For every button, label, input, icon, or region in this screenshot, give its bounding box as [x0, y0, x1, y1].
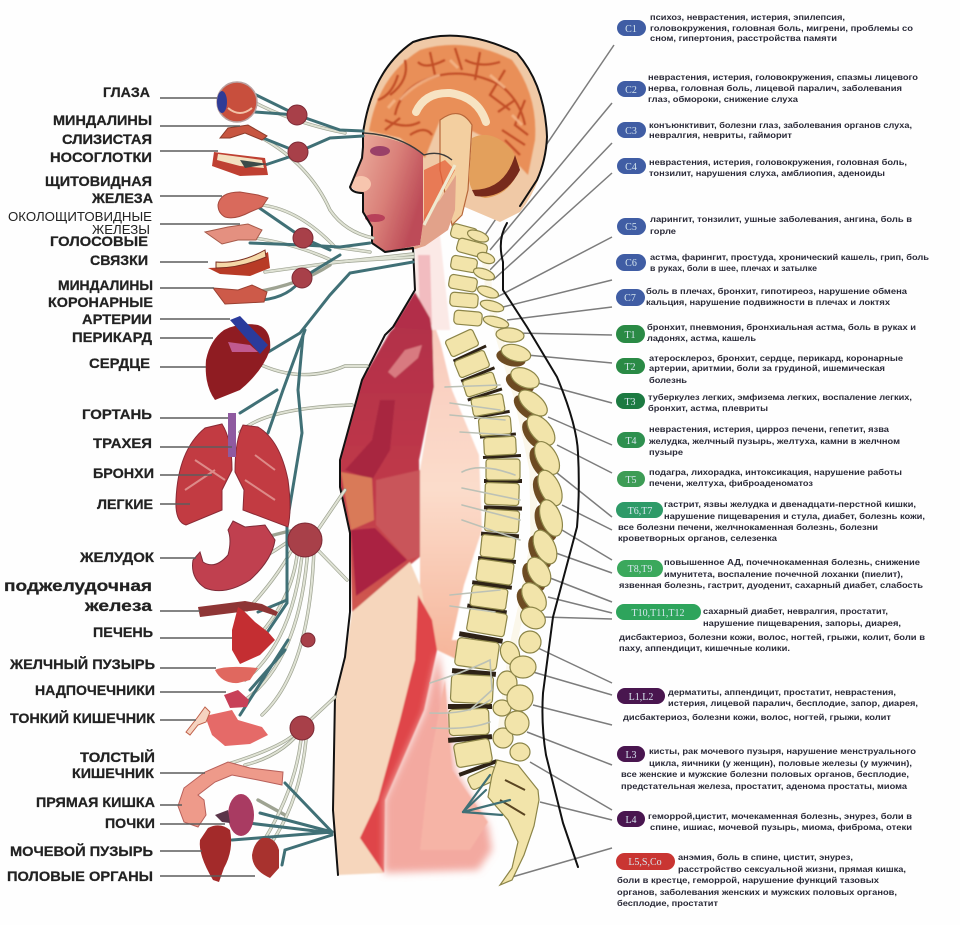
light gyri bands — [388, 60, 522, 125]
T3: T3 — [624, 397, 636, 408]
right column: conditions by vertebra — [616, 12, 929, 908]
skull — [363, 36, 547, 235]
organ names: СВЯЗКИ — [90, 252, 148, 268]
teal nerves — [232, 92, 413, 865]
organ names: МИНДАЛИНЫ — [58, 277, 153, 293]
light nerve cores — [225, 100, 413, 842]
organ names: ПЕЧЕНЬ — [93, 624, 153, 640]
T10 T11 T12 — [616, 604, 925, 653]
sacrum and coccyx — [488, 760, 539, 885]
T3: туберкулез легких, эмфизема легких, воспаление легких, — [648, 392, 912, 402]
T4: неврастения, истерия, цирроз печени, гепетит, язва — [649, 424, 889, 434]
T8 T9: T8,T9 — [628, 564, 652, 575]
leader lines: spine to conditions — [483, 45, 614, 877]
mottled lung light patches — [345, 400, 395, 480]
organ names: ГОРТАНЬ — [82, 406, 152, 422]
L1 L2 — [617, 687, 918, 722]
L3: все женские и мужские болезни половых органов, бесплодие, — [621, 769, 909, 779]
T6 T7: кроветворных органов, селезенка — [618, 533, 777, 543]
organ names — [4, 84, 155, 884]
T6 T7: нарушение пищеварения и стула, диабет, болезнь кожи, — [664, 511, 925, 521]
organ names: КОРОНАРНЫЕ — [48, 294, 153, 310]
organ names: ГЛАЗА — [103, 84, 150, 100]
T1: бронхит, пневмония, бронхиальная астма, боль в руках и — [647, 322, 916, 332]
vertebral discs — [448, 345, 522, 777]
body outline — [333, 36, 579, 875]
gyri — [378, 48, 528, 155]
C4: тонзилит, нарушения слуха, амблиопия, аденоиды — [649, 168, 885, 178]
T5 — [617, 467, 902, 488]
icon: tonsils — [220, 125, 267, 140]
icon: large intestine — [178, 762, 283, 827]
sacral teal nerves — [463, 775, 510, 815]
T5: подагра, лихорадка, интоксикация, нарушение работы — [649, 467, 902, 477]
organ names: поджелудочная — [4, 578, 152, 595]
C2: нерва, головная боль, лицевой паралич, заболевания — [648, 83, 902, 93]
C6: C6 — [625, 258, 637, 269]
C7: C7 — [624, 293, 636, 304]
organ names: НАДПОЧЕЧНИКИ — [35, 682, 155, 698]
C1: головокружения, головная боль, мигрени, проблемы со — [650, 23, 913, 33]
organ names: БРОНХИ — [93, 465, 154, 481]
spine — [430, 223, 567, 885]
C4: неврастения, истерия, головокружения, головная боль, — [649, 157, 907, 167]
nose highlight — [351, 176, 371, 192]
ganglia — [287, 105, 322, 740]
T4: T4 — [625, 436, 637, 447]
organ names: ЛЕГКИЕ — [97, 496, 153, 512]
L5 S Co: L5,S,Co — [628, 857, 662, 868]
C1: психоз, неврастения, истерия, эпилепсия, — [650, 12, 845, 22]
eye shadow — [370, 146, 390, 156]
icon: bladder — [200, 825, 231, 882]
L4: геморрой,цистит, мочекаменная болезнь, энурез, боли в — [648, 811, 912, 821]
red strip — [360, 595, 437, 873]
L5 S Co: боли в крестце, геморрой, нарушение функций тазовых — [617, 875, 879, 885]
icon: pancreas — [198, 601, 278, 617]
C6: в руках, боли в шее, плечах и затылке — [650, 263, 817, 273]
L5 S Co: органов, заболевания женских и мужских половых органов, — [617, 887, 897, 897]
organ names: СЕРДЦЕ — [89, 355, 150, 371]
organ names: МИНДАЛИНЫ — [53, 112, 152, 128]
organ names: ЖЕЛЕЗЫ — [92, 223, 150, 237]
L4 — [617, 811, 912, 832]
icon: thyroid — [218, 192, 268, 218]
T2: T2 — [624, 362, 636, 373]
organ names: ГОЛОСОВЫЕ — [50, 233, 148, 249]
organ names: ПЕРИКАРД — [72, 329, 152, 345]
organ names: ТРАХЕЯ — [93, 435, 152, 451]
L3: кисты, рак мочевого пузыря, нарушение менструального — [649, 746, 916, 756]
C3: невралгия, невриты, гайморит — [649, 130, 792, 140]
C3: конъюнктивит, болезни глаз, заболевания органов слуха, — [649, 120, 912, 130]
T6 T7: все болезни печени, желчнокаменная болезнь, болезни — [618, 522, 878, 532]
C4 — [617, 157, 907, 178]
organ names: НОСОГЛОТКИ — [50, 149, 152, 165]
T10 T11 T12: дисбактериоз, болезни кожи, волос, ногтей, грыжи, колит, боли в — [619, 632, 925, 642]
C2: C2 — [625, 85, 637, 96]
T8 T9: имунитета, воспаление почечной лоханки (пиелит), — [664, 569, 903, 579]
C6 — [616, 252, 929, 273]
T5: печени, желтуха, фиброаденоматоз — [649, 478, 813, 488]
C1: сном, гипертония, расстройства памяти — [650, 33, 837, 43]
T2: атеросклероз, бронхит, сердце, перикард, коронарные — [649, 353, 903, 363]
icon: small intestine — [186, 707, 268, 746]
C1: C1 — [625, 24, 637, 35]
organ names: ПОЛОВЫЕ ОРГАНЫ — [7, 868, 153, 884]
L1 L2: дерматиты, аппендицит, простатит, неврастения, — [668, 687, 896, 697]
icon: gallbladder — [215, 667, 258, 683]
C6: астма, фарингит, простуда, хронический кашель, грип, боль — [650, 252, 929, 262]
brain — [369, 45, 535, 175]
icon: heart — [206, 316, 270, 400]
back of head and back — [363, 36, 579, 867]
L5 S Co: расстройство сексуальной жизни, прямая кишка, — [678, 864, 906, 874]
C5: C5 — [625, 222, 637, 233]
organ names: ЖЕЛЧНЫЙ ПУЗЫРЬ — [9, 655, 155, 672]
T10 T11 T12: паху, аппендицит, кишечные колики. — [619, 643, 790, 653]
mouth — [365, 214, 385, 222]
cerebellum — [469, 135, 520, 198]
icon: stomach — [192, 521, 275, 591]
L1 L2: дисбактериоз, болезни кожи, волос, ногтей, грыжи, колит — [623, 712, 891, 722]
face — [350, 134, 423, 252]
organ names: ОКОЛОЩИТОВИДНЫЕ — [8, 210, 152, 224]
nerves: left trunk — [225, 92, 413, 865]
icon: kidney — [215, 794, 254, 836]
C2: неврастения, истерия, головокружения, спазмы лицевого — [648, 72, 918, 82]
icon: nasopharynx — [212, 152, 268, 176]
diaphragm lower liver — [351, 528, 407, 596]
T2: артерии, аритмии, боли за грудиной, ишемическая — [649, 363, 885, 373]
spinal cord — [483, 240, 534, 740]
L5 S Co: анэмия, боль в спине, цистит, энурез, — [678, 852, 853, 862]
icon: adrenals — [224, 690, 249, 708]
organ names: ТОНКИЙ КИШЕЧНИК — [10, 709, 155, 726]
T6 T7: гастрит, язвы желудка и двенадцати-перстной кишки, — [664, 499, 916, 509]
leader lines to organs — [160, 98, 255, 876]
buttock pink — [384, 650, 492, 873]
C7: боль в плечах, бронхит, гипотиреоз, нарушение обмена — [646, 286, 907, 296]
organ names: ЩИТОВИДНАЯ — [45, 173, 152, 189]
T10 T11 T12: сахарный диабет, невралгия, простатит, — [703, 606, 888, 616]
L3: цикла, яичники (у женщин), половые железы (у мужчин), — [649, 758, 912, 768]
organ names: ТОЛСТЫЙ — [80, 748, 155, 765]
T2 — [616, 353, 903, 385]
T6 T7: T6,T7 — [628, 506, 652, 517]
white sliver — [435, 320, 488, 640]
L3: L3 — [625, 750, 637, 761]
icon: reproductive organs — [252, 838, 279, 878]
face profile — [333, 134, 415, 875]
T10 T11 T12: T10,T11,T12 — [632, 608, 684, 619]
T5: T5 — [625, 475, 637, 486]
icon: tonsils lower — [213, 285, 267, 304]
organ names: ЖЕЛЕЗА — [91, 190, 153, 206]
T8 T9: язвенная болезнь, гастрит, дуоденит, сахарный диабет, слабость — [619, 580, 923, 590]
jaw and ear — [385, 175, 456, 252]
C1 — [617, 12, 913, 43]
grey nerves — [225, 100, 413, 842]
cerebellum shadow — [472, 155, 520, 196]
icon: trachea — [228, 413, 236, 457]
spinous processes — [466, 228, 567, 761]
corpus callosum — [416, 93, 486, 122]
C2 — [617, 72, 918, 104]
C2: глаз, обмороки, снижение слуха — [648, 94, 798, 104]
icon: lungs — [176, 424, 290, 527]
organ names: АРТЕРИИ — [82, 311, 152, 327]
L4: спине, ишиас, мочевой пузырь, миома, фиброма, отеки — [650, 822, 912, 832]
T10 T11 T12: нарушение пищеварения, запоры, диарея, — [703, 618, 901, 628]
C5: ларингит, тонзилит, ушные заболевания, ангина, боль в — [650, 214, 912, 224]
icon: parathyroid — [205, 224, 262, 244]
icon: liver — [232, 607, 275, 664]
C4: C4 — [625, 162, 637, 173]
C5: горле — [650, 226, 676, 236]
C7: кальция, нарушение подвижности в плечах и локтях — [646, 297, 890, 307]
mid abdomen orange — [341, 472, 374, 530]
L5 S Co: бесплодие, простатит — [617, 898, 718, 908]
left labels and leaders — [4, 84, 255, 884]
L1 L2: истерия, лицевой паралич, бесплодие, запор, диарея, — [668, 698, 918, 708]
L3: предстательная железа, простатит, аденома простаты, миома — [621, 781, 907, 791]
organ names: железа — [84, 598, 152, 615]
T6 T7 — [616, 499, 925, 543]
T3: бронхит, астма, плевриты — [648, 403, 768, 413]
C7 — [616, 286, 907, 307]
lung highlight — [388, 345, 422, 378]
head and brain — [350, 36, 547, 252]
T4 — [617, 424, 900, 457]
head nerves — [364, 133, 452, 160]
C5 — [617, 214, 912, 236]
vertebral bodies — [445, 223, 520, 791]
torso red organs — [340, 318, 434, 612]
T2: болезнь — [649, 375, 687, 385]
C3: C3 — [625, 126, 637, 137]
T8 T9 — [617, 557, 923, 590]
C3 — [617, 120, 912, 140]
icon: eye — [217, 82, 257, 122]
L1 L2: L1,L2 — [629, 692, 653, 703]
organ names: КИШЕЧНИК — [72, 765, 154, 781]
organ illustrations — [176, 82, 290, 882]
T1: T1 — [624, 330, 636, 341]
spinal nerves to torso — [430, 385, 520, 728]
T1 — [616, 322, 916, 343]
lower abdomen beige — [333, 562, 430, 875]
T1: ладонях, астма, кашель — [647, 333, 756, 343]
T4: пузыре — [649, 447, 683, 457]
L5 S Co — [616, 852, 906, 908]
central pale torso — [420, 318, 488, 660]
L4: L4 — [625, 815, 637, 826]
L3 — [617, 746, 916, 791]
organ names: ПОЧКИ — [105, 815, 155, 831]
T4: желудка, желчный пузырь, желтуха, камни в желчном — [648, 436, 900, 446]
body and internal organs silhouette — [333, 235, 492, 875]
T3 — [616, 392, 912, 413]
T8 T9: повышенное АД, почечнокаменная болезнь, снижение — [664, 557, 920, 567]
process shadows — [494, 346, 562, 621]
icon: vocal cords — [208, 250, 270, 276]
neck — [414, 235, 450, 330]
organ names: ПРЯМАЯ КИШКА — [36, 794, 155, 810]
brainstem — [440, 114, 472, 225]
organ names: ЖЕЛУДОК — [79, 549, 154, 565]
organ names: СЛИЗИСТАЯ — [62, 131, 152, 147]
organ names: МОЧЕВОЙ ПУЗЫРЬ — [10, 842, 153, 859]
